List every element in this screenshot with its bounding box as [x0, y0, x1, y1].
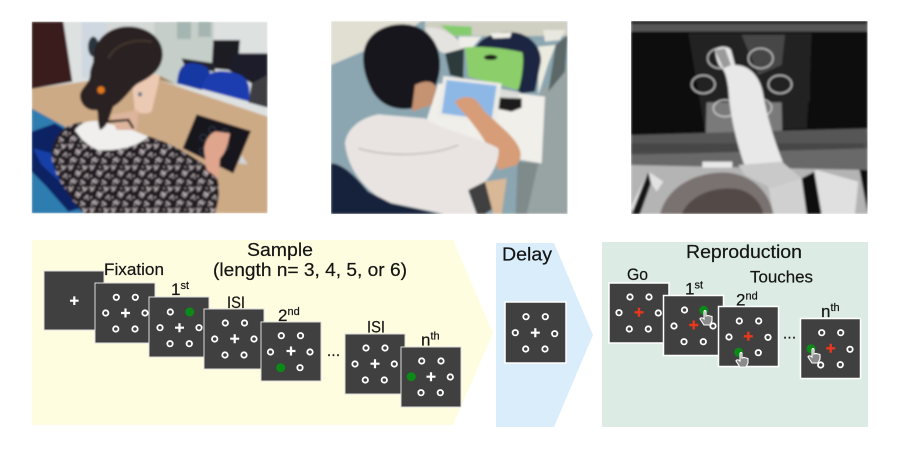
label: second touch: 2: [736, 291, 745, 310]
heading: sample: Sample: [247, 239, 313, 260]
screen: second touch: [718, 306, 778, 367]
screen: second sample: [261, 322, 321, 381]
screen: last interval: [345, 334, 405, 394]
heading: reproduction: Reproduction: [686, 241, 802, 262]
label: fixation: Fixation: [104, 260, 164, 279]
label: second touch: nd: [745, 291, 758, 303]
label: go: Go: [627, 265, 648, 284]
heading: delay: Delay: [502, 244, 553, 265]
label: second item: nd: [287, 306, 300, 318]
heading: sequence length: (length n= 3, 4, 5, or 6): [213, 260, 407, 280]
screen: delay: [505, 302, 566, 363]
panel: reproduction phase: [602, 242, 868, 427]
photo: boy using a tablet at a school desk: [331, 21, 568, 214]
label: nth item: n: [421, 331, 430, 350]
label: nth item: th: [430, 331, 440, 343]
photo: woman using a touch tablet: [32, 22, 268, 213]
panel: delay phase arrow: [496, 243, 593, 427]
label: inter-stimulus interval: ISI: [227, 293, 245, 312]
screen: first sample: [149, 297, 209, 357]
screen: first interval: [204, 309, 264, 369]
label: second interval: ISI: [367, 318, 385, 337]
label: nth touch: th: [830, 302, 840, 314]
label: first item: st: [180, 280, 189, 292]
ellipsis: reproduction sequence: ...: [783, 326, 796, 342]
ellipsis: sample sequence: ...: [327, 343, 340, 360]
label: first item: 1: [171, 280, 180, 299]
photo: monkey reaching toward a touch screen: [631, 21, 868, 214]
screen: nth touch: [800, 318, 860, 378]
screen: go signal: [609, 283, 669, 343]
label: first touch: 1: [685, 279, 694, 298]
label: first touch: st: [694, 279, 703, 291]
label: nth touch: n: [821, 302, 830, 321]
screen: first touch: [664, 296, 724, 356]
screen: nth sample: [401, 347, 461, 407]
screen: fixation cross: [44, 271, 104, 330]
label: touches: Touches: [750, 268, 813, 287]
label: second item: 2: [278, 306, 287, 325]
panel: sample phase arrow: [32, 240, 493, 425]
screen: fixation with targets: [95, 283, 155, 343]
